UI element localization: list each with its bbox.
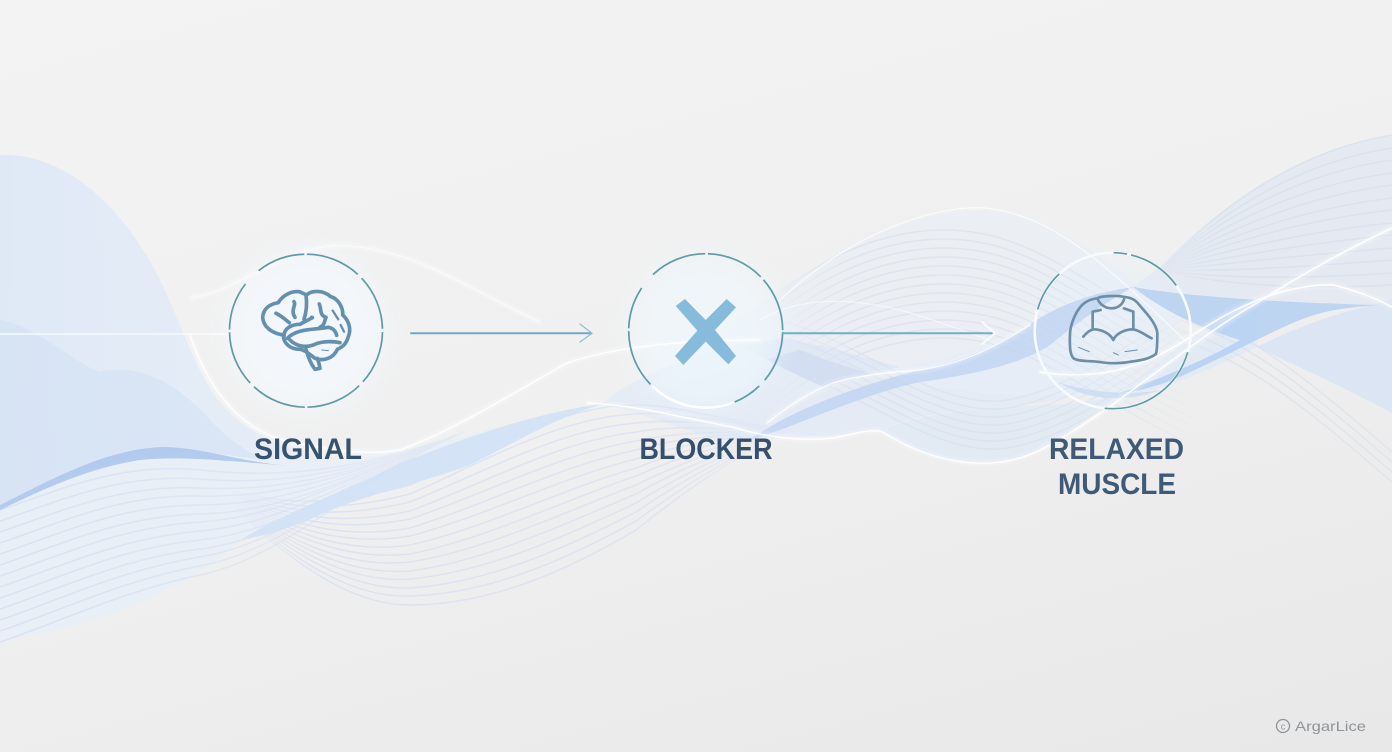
arrow: signal to blocker (411, 324, 592, 342)
wave: blue ribbons (0, 287, 1377, 540)
wave: pale blue fills (0, 135, 1392, 642)
watermark: ArgarLice (1295, 718, 1366, 734)
label: relaxed muscle: MUSCLE (1058, 468, 1176, 501)
icon: muscle (1070, 296, 1157, 363)
watermark: c (1281, 722, 1286, 732)
step 3: relaxed muscle (1035, 253, 1191, 501)
label: signal: SIGNAL (254, 433, 362, 466)
watermark (1276, 718, 1366, 734)
soft glow behind icons (226, 251, 1182, 411)
signal ring (230, 254, 382, 407)
step 2: blocker (629, 254, 783, 466)
glowing white signal lines (0, 208, 1392, 463)
label: relaxed muscle (1049, 433, 1184, 501)
muscle ring (1035, 253, 1191, 409)
wave: fine line bundles (0, 135, 1392, 642)
icon: brain (263, 291, 350, 369)
arrow: blocker to muscle (783, 322, 995, 344)
icon: x blocker (675, 299, 736, 365)
label: relaxed muscle: RELAXED (1049, 433, 1184, 466)
blocker ring (629, 254, 783, 408)
label: blocker: BLOCKER (640, 433, 773, 466)
step 1: signal (230, 254, 382, 466)
